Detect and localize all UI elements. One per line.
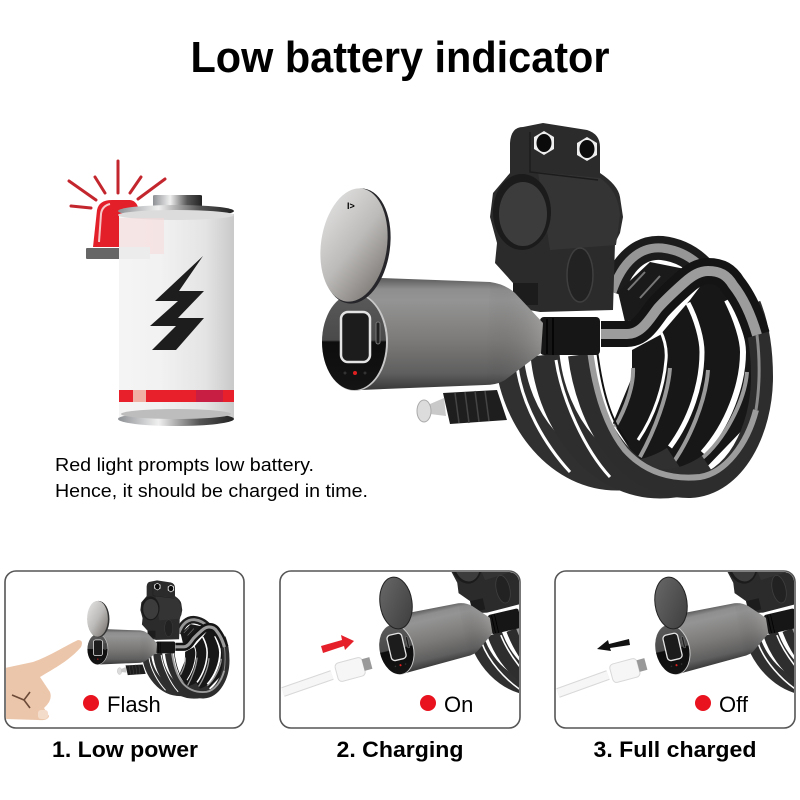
handlebar clamp [490,123,623,312]
panel: charging [279,570,521,729]
battery base [118,412,234,426]
lock cable coils [509,248,762,487]
battery top terminal [153,195,202,212]
icon: red siren [69,161,165,259]
arrow: plug in [321,635,354,653]
close-up lock [379,572,519,694]
description text: Hence, it should be charged in time. [55,480,368,501]
status dot: off [695,695,711,711]
low battery red band [119,390,234,402]
siren light rays [69,161,165,208]
close-up lock [654,572,794,693]
icon: lightning bolt [150,256,204,350]
main product image: bike lock [313,123,762,487]
arrow: unplug [597,639,630,651]
fingerprint cover [313,184,398,308]
battery body [119,214,234,418]
lock barrel and fingerprint face [322,278,600,391]
hand pressing fingerprint [5,640,82,720]
description text [55,454,368,501]
siren base [86,248,128,259]
caption: full charged: 3. Full charged [594,737,756,762]
panel: low power [5,571,244,728]
caption: charging: 2. Charging [336,737,464,762]
status dot: on [420,695,436,711]
panel: full charged [554,570,796,729]
small lock image [87,580,226,695]
status text: on: On [444,692,473,717]
fingerprint cover: I> [347,201,355,211]
description text: Red light prompts low battery. [55,454,314,475]
icon: battery [118,195,234,426]
caption: low power: 1. Low power [52,737,198,762]
usb charging cable [283,657,372,692]
siren dome [93,200,142,247]
status text: off: Off [719,692,749,717]
status dot: flash [83,695,99,711]
title: Low battery indicator [190,33,610,82]
lock plunger [417,390,507,424]
usb charging cable [558,658,647,693]
status text: flash: Flash [107,692,161,717]
